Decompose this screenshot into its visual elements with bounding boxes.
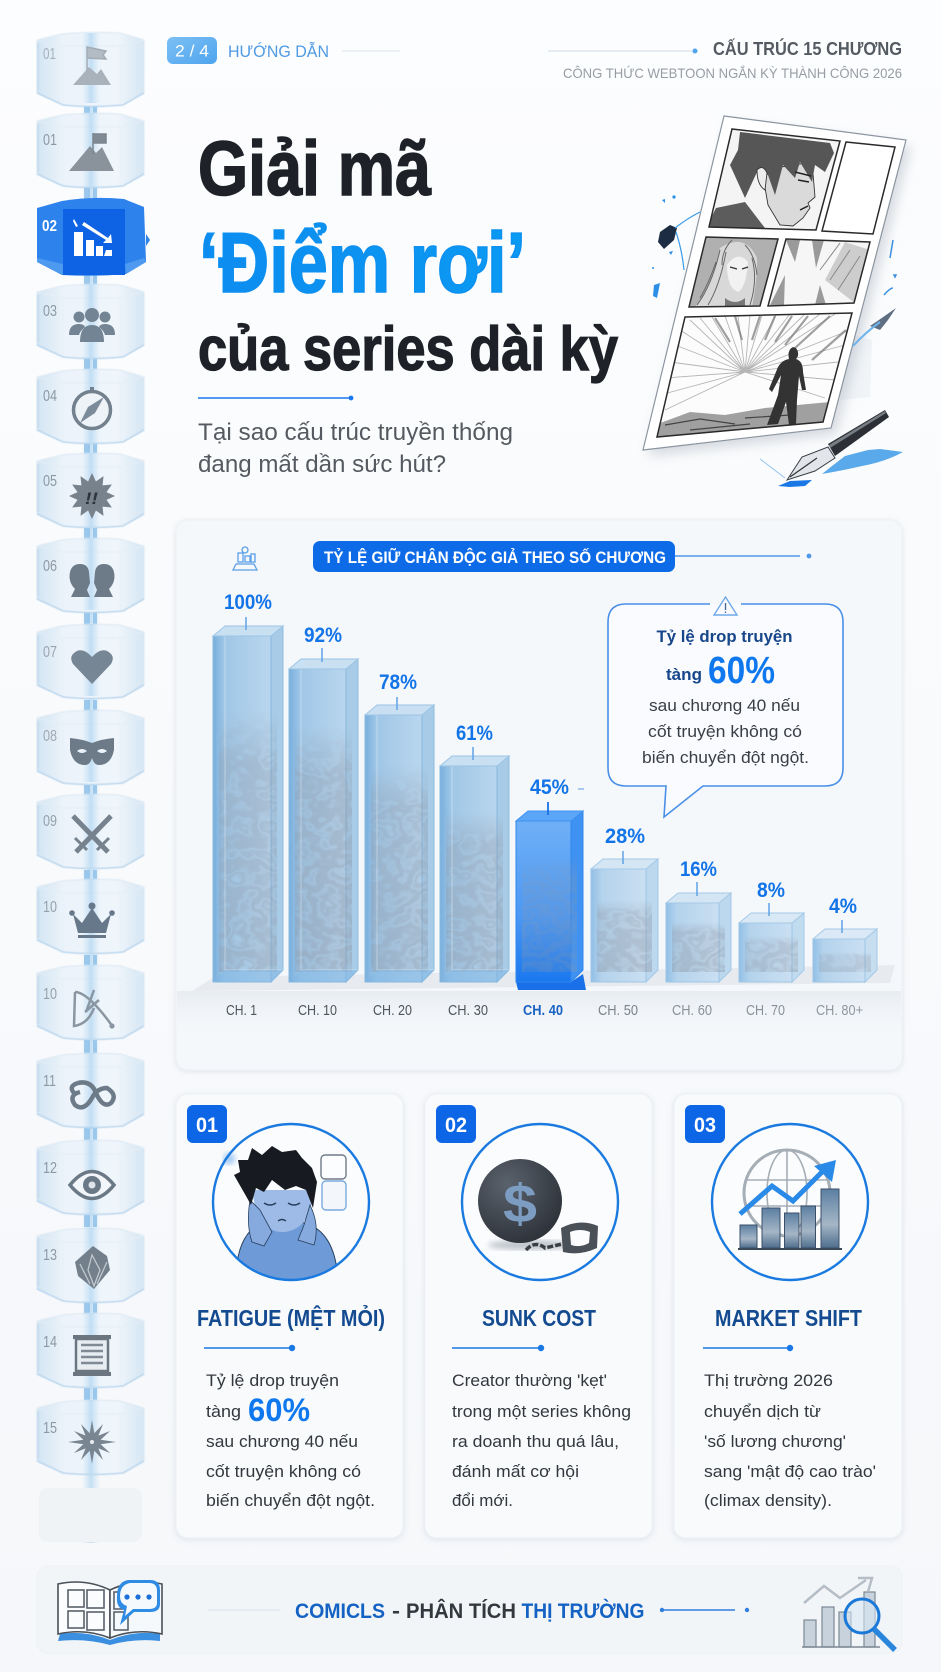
manga page illustration [643, 116, 911, 487]
body text: chuyển dịch từ [704, 1402, 821, 1421]
bar CH. 80+ 4%: 4% [829, 895, 857, 918]
rule [703, 1345, 793, 1351]
cube 09 crossed swords [37, 794, 144, 868]
icon: chart with magnifier [802, 1578, 895, 1650]
bar CH. 30 61% [440, 722, 509, 1019]
cube 07 heart [37, 624, 144, 698]
header left: page badge: HƯỚNG DẪN [228, 42, 329, 61]
cube 04 compass [37, 369, 144, 444]
badge 03 [685, 1105, 725, 1143]
cube 11 link: 11 [43, 1073, 56, 1090]
title rule [198, 396, 353, 400]
bar CH. 40 45% highlighted: 45% [530, 776, 569, 799]
cube 04 compass: 04 [43, 388, 57, 405]
cube 01 flag on mountain [37, 32, 144, 107]
body text: trong một series không [452, 1402, 631, 1421]
title: của series dài kỳ [198, 315, 618, 384]
panel 3: girl portrait [690, 238, 777, 306]
cube 08 mask [37, 710, 144, 784]
bar CH. 1 100%: CH. 1 [226, 1003, 257, 1019]
cube 11 link [37, 1053, 144, 1129]
card 02: sunk cost [425, 1094, 652, 1538]
bar CH. 10 92%: CH. 10 [298, 1003, 337, 1019]
cube 12 eye [37, 1140, 144, 1214]
cube 08 mask: 08 [43, 728, 57, 745]
cube 03 group of people [37, 284, 144, 358]
title: Giải mã [198, 126, 432, 212]
bar CH. 20 78% [365, 671, 434, 1019]
footer text [295, 1599, 644, 1623]
footer text: THỊ TRƯỜNG [522, 1599, 644, 1623]
bar CH. 50 28%: CH. 50 [598, 1003, 638, 1019]
panel 2: empty [822, 142, 895, 234]
body text: 60% [248, 1392, 310, 1428]
title: ‘Điểm rơi’ [199, 216, 526, 311]
bar CH. 20 78%: 78% [379, 671, 417, 694]
body text: cốt truyện không có [206, 1462, 361, 1481]
subtitle: đang mất dần sức hút? [198, 451, 446, 478]
cube 12 eye: 12 [43, 1160, 57, 1177]
cube 02 active blue: 02 [42, 218, 57, 235]
body text: đổi mới. [452, 1491, 513, 1510]
cube 15 explosion burst [37, 1400, 144, 1474]
badge 01 [187, 1105, 227, 1143]
card 01: fatigue [176, 1094, 403, 1538]
bar CH. 60 16% [666, 858, 731, 1019]
cube 03 group of people: 03 [43, 303, 57, 320]
callout: drop rate: Tỷ lệ drop truyện [656, 627, 792, 646]
illustration: ball and chain: $ [503, 1174, 537, 1234]
body text: sang 'mật độ cao trào' [704, 1462, 876, 1481]
bar CH. 70 8% [739, 879, 804, 1019]
cube ghost base [39, 1488, 142, 1542]
badge 03: 03 [694, 1114, 716, 1137]
header right: series label: CẤU TRÚC 15 CHƯƠNG [713, 38, 902, 59]
cube 05 burst with exclamation: 05 [43, 473, 57, 490]
body text: (climax density). [704, 1491, 832, 1510]
bar CH. 80+ 4%: CH. 80+ [816, 1003, 863, 1019]
heading pill: TỶ LỆ GIỮ CHÂN ĐỘC GIẢ THEO SỐ CHƯƠNG [324, 547, 666, 567]
panel 5: silhouette with speed lines [658, 314, 846, 436]
header right: series label: CÔNG THỨC WEBTOON NGẮN KỲ THÀNH CÔNG 2026 [563, 64, 902, 81]
callout: drop rate: tàng [666, 665, 702, 684]
heading: SUNK COST [482, 1305, 596, 1331]
cube 13 crystal rock [37, 1228, 144, 1302]
card 03: market shift [674, 1094, 902, 1538]
callout: drop rate: sau chương 40 nếu [649, 696, 800, 715]
bar CH. 30 61%: CH. 30 [448, 1003, 488, 1019]
cube 05 burst with exclamation: !! [85, 489, 98, 508]
header left: page badge: 2 / 4 [175, 42, 209, 60]
body text [206, 1371, 375, 1510]
footer bar [37, 1566, 902, 1653]
cube 10 crown [37, 879, 144, 954]
bar CH. 50 28%: 28% [605, 825, 645, 848]
footer text: - [392, 1600, 400, 1623]
rule [204, 1345, 295, 1351]
cube 01 flag on mountain dark: 01 [43, 132, 57, 149]
body text [704, 1371, 876, 1510]
cube 14 scroll: 14 [43, 1334, 57, 1351]
body text: Thị trường 2026 [704, 1371, 833, 1390]
cube 14 scroll [37, 1313, 144, 1388]
body text: biến chuyển đột ngột. [206, 1491, 375, 1510]
cube 02 active blue [37, 198, 150, 276]
icon: open comic book [58, 1580, 162, 1645]
illustration: globe with rising chart [712, 1124, 868, 1280]
panel 4: action streaks [770, 240, 868, 305]
body text: sau chương 40 nếu [206, 1432, 358, 1451]
body text: đánh mất cơ hội [452, 1462, 579, 1481]
heading: MARKET SHIFT [715, 1305, 862, 1331]
body text: tàng [206, 1402, 241, 1421]
bar CH. 10 92% [289, 624, 358, 1019]
body text: Creator thường 'kẹt' [452, 1371, 607, 1390]
footer text: PHÂN TÍCH [406, 1599, 516, 1623]
bar CH. 40 45% highlighted [516, 776, 586, 1019]
panel: reader retention chart [176, 520, 902, 1070]
bar CH. 80+ 4% [813, 895, 877, 1019]
callout: drop rate: biến chuyển đột ngột. [642, 748, 809, 767]
icon: readers [233, 547, 257, 570]
cube 01 flag on mountain dark [37, 113, 144, 188]
cube 15 explosion burst: 15 [43, 1420, 57, 1437]
title [198, 126, 618, 384]
bar CH. 1 100% [213, 591, 283, 1019]
cube 10 bow and arrow: 10 [43, 986, 57, 1003]
subtitle: Tại sao cấu trúc truyền thống [198, 419, 513, 446]
cube 06 two faces: 06 [43, 558, 57, 575]
body text: 'số lương chương' [704, 1432, 846, 1451]
bar CH. 30 61%: 61% [456, 722, 493, 745]
illustration: ball and chain [462, 1124, 618, 1280]
fountain pen [760, 410, 903, 487]
panel 1: boy portrait [710, 130, 838, 229]
callout: drop rate [608, 597, 843, 817]
icon: warning triangle [714, 597, 737, 615]
rule [452, 1345, 544, 1351]
heading: FATIGUE (MỆT MỎI) [197, 1303, 385, 1331]
ink splatter left [652, 195, 700, 298]
cube 01 flag on mountain: 01 [43, 46, 56, 63]
footer text: COMICLS [295, 1600, 385, 1623]
floor [177, 965, 901, 1036]
bar CH. 1 100%: 100% [224, 591, 272, 614]
callout: drop rate: cốt truyện không có [648, 722, 802, 741]
bar CH. 20 78%: CH. 20 [373, 1003, 412, 1019]
body text: Tỷ lệ drop truyện [206, 1371, 339, 1390]
bar CH. 70 8%: CH. 70 [746, 1003, 785, 1019]
header right: series label [548, 38, 902, 81]
body text: ra doanh thu quá lâu, [452, 1432, 619, 1451]
cube 10 crown: 10 [43, 899, 57, 916]
cube 13 crystal rock: 13 [43, 1247, 57, 1264]
bar CH. 60 16%: CH. 60 [672, 1003, 712, 1019]
bar CH. 50 28% [591, 825, 658, 1019]
subtitle [198, 419, 513, 478]
cube 06 two faces [37, 538, 144, 612]
bar CH. 40 45% highlighted: CH. 40 [523, 1003, 563, 1019]
bar CH. 70 8%: 8% [757, 879, 785, 902]
cube 10 bow and arrow [37, 965, 144, 1040]
bar CH. 60 16%: 16% [680, 858, 717, 881]
illustration: tired boy [213, 1124, 369, 1280]
heading pill [313, 541, 811, 572]
badge 02: 02 [445, 1114, 467, 1137]
sidebar: chapter cube stack [37, 32, 150, 1543]
cube 09 crossed swords: 09 [43, 813, 57, 830]
body text [452, 1371, 631, 1510]
callout: drop rate: 60% [708, 650, 775, 692]
cube 07 heart: 07 [43, 644, 57, 661]
badge 02 [436, 1105, 476, 1143]
header left: page badge [167, 37, 400, 64]
icon: phones [321, 1155, 346, 1179]
cube 05 burst with exclamation [37, 453, 144, 528]
ink splatter right [853, 240, 896, 346]
bar CH. 10 92%: 92% [304, 624, 342, 647]
badge 01: 01 [196, 1114, 218, 1137]
